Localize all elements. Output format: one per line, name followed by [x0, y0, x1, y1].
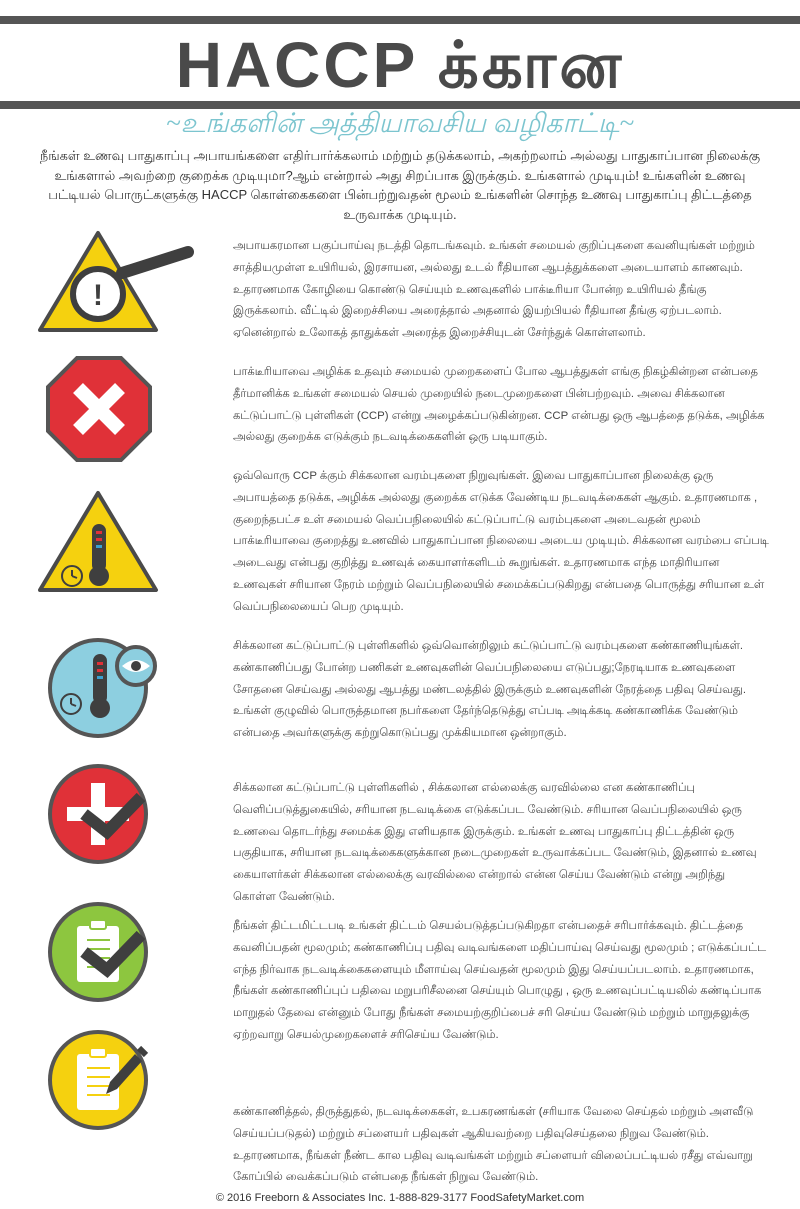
icon: green circle with clipboard and check — [48, 902, 148, 1002]
text block 5: பகுதியாக, சரியான நடவடிக்கைகளுக்கான நடைமுறைகள் உருவாக்கப்பட வேண்டும், இதனால் உணவு — [233, 847, 757, 859]
text block 6: நீங்கள் திட்டமிட்டபடி உங்கள் திட்டம் செயல்படுத்தப்படுகிறதா என்பதைச் சரிபார்க்கவும். திட்டத்தை — [233, 920, 743, 932]
intro text: நீங்கள் உணவு பாதுகாப்பு அபாயங்களை எதிர்பார்க்கலாம் மற்றும் தடுக்கலாம், அகற்றலாம் அல்லது பாதுகாப்பான நிலைக்கு — [40, 148, 760, 163]
icon: red circle with cross and check — [48, 764, 148, 864]
text block 3: அடைவது என்பது குறித்து உணவுக் கையாளர்களிடம் கூறுங்கள். உதாரணமாக எந்த மாதிரியான — [233, 557, 719, 569]
footer: © 2016 Freeborn & Associates Inc. 1-888-829-3177 FoodSafetyMarket.com — [216, 1192, 584, 1204]
text block 3 — [233, 470, 769, 614]
text block 5: கொள்ள வேண்டும். — [233, 891, 335, 903]
text block 3: குறைந்தபட்ச உள் சமையல் வெப்பநிலையில் கட்டுப்பாட்டு வரம்புகளை அடைவதன் மூலம் — [233, 514, 700, 526]
text block 3: வெப்பநிலையைப் பெற முடியும். — [233, 601, 404, 613]
icon: blue monitor circle — [48, 638, 157, 738]
intro text: பட்டியல் பொருட்களுக்கு HACCP கொள்கைகளை பின்பற்றுவதன் மூலம் உங்களின் சொந்த உணவு பாதுகாப்பு திட்டத்தை — [48, 187, 752, 202]
text block 3: அபாயத்தை தடுக்க, அழிக்க அல்லது குறைக்க எடுக்க வேண்டிய நடவடிக்கைகள் ஆகும். உதாரணமாக , — [233, 492, 757, 504]
text block 1: சாத்தியமுள்ள உயிரியல், இரசாயன, அல்லது உடல் ரீதியான ஆபத்துக்களை அடையாளம் காணவும். — [233, 262, 743, 274]
text block 1: அபாயகரமான பகுப்பாய்வு நடத்தி தொடங்கவும். உங்கள் சமையல் குறிப்புகளை கவனியுங்கள் மற்றும் — [233, 240, 755, 252]
text block 6: மாறுதல் தேவை என்னும் போது நீங்கள் சமையற்குறிப்பைச் சரி செய்ய வேண்டும் மற்றும் மாறுதலுக்கு — [233, 1007, 749, 1019]
text block 5: சிக்கலான கட்டுப்பாட்டு புள்ளிகளில் , சிக்கலான எல்லைக்கு வரவில்லை என கண்காணிப்பு — [233, 782, 695, 794]
text block 6: நீங்கள் கண்காணிப்புப் பதிவை மறுபரிசீலனை செய்யும் பொழுது , ஒரு உணவுப்பட்டியலில் கண்டிப்பாக — [233, 985, 761, 997]
text block 2: பாக்டீரியாவை அழிக்க உதவும் சமையல் முறைகளைப் போல ஆபத்துகள் எங்கு நிகழ்கின்றன என்பதை — [233, 366, 758, 378]
text block 7 — [233, 1106, 753, 1184]
text block 7: கண்காணித்தல், திருத்துதல், நடவடிக்கைகள், உபகரணங்கள் (சரியாக வேலை செய்தல் மற்றும் அளவீடு — [233, 1106, 753, 1118]
text block 7: கோப்பில் வைக்கப்படும் என்பதை நீங்கள் நிறுவ வேண்டும். — [233, 1171, 538, 1183]
text block 2: அல்லது குறைக்க எடுக்கும் நடவடிக்கைகளின் ஒரு படியாகும். — [233, 431, 547, 443]
text block 6: கவனிப்பதன் மூலமும்; கண்காணிப்பு பதிவு வடிவங்களை மதிப்பாய்வு செய்வது மூலமும் ; எடுக்கப்பட்ட — [233, 942, 766, 954]
text block 2 — [233, 366, 764, 444]
icon: yellow circle with clipboard and pencil — [48, 1030, 148, 1130]
text block 2: தீர்மானிக்க உங்கள் சமையல் செயல் முறையில் நடைமுறைகளை பின்பற்றவும். அவை சிக்கலான — [233, 388, 725, 400]
text block 1: உதாரணமாக கோழியை கொண்டு செய்யும் உணவுகளில் பாக்டீரியா போன்ற உயிரியல் தீங்கு — [233, 284, 706, 296]
text block 5: கையாளர்கள் சிக்கலான எல்லைக்கு வரவில்லை என்றால் என்ன செய்ய வேண்டும் என்று அறிந்து — [233, 869, 725, 881]
text block 6: ஏற்றவாறு செயல்முறைகளைச் சரிசெய்ய வேண்டும். — [233, 1029, 499, 1041]
subtitle: ~உங்களின் அத்தியாவசிய வழிகாட்டி~ — [166, 108, 634, 138]
text block 5: உணவை தொடர்ந்து சமைக்க இது எளியதாக இருக்கும். உங்கள் உணவு பாதுகாப்பு திட்டத்தின் ஒரு — [233, 826, 734, 838]
text block 7: செய்யப்படுதல்) மற்றும் சப்ளையர் பதிவுகள் ஆகியவற்றை பதிவுசெய்தலை நிறுவ வேண்டும். — [233, 1128, 709, 1140]
text block 1 — [233, 240, 755, 340]
title: HACCP க்கான — [176, 29, 624, 101]
text block 4: கண்காணிப்பது போன்ற பணிகள் உணவுகளின் வெப்பநிலையை எடுப்பது;நேரடியாக உணவுகளை — [233, 662, 735, 674]
text block 3: பாக்டீரியாவை குறைத்து உணவில் பாதுகாப்பான நிலையை அடைய முடியும். சிக்கலான வரம்பை எப்படி — [233, 535, 769, 547]
text block 5: வெளிப்படுத்துகையில், சரியான நடவடிக்கை எடுக்கப்பட வேண்டும். சரியான வெப்பநிலையில் ஒரு — [233, 804, 742, 816]
text block 1: இருக்கலாம். வீட்டில் இறைச்சியை அரைத்தால் அதனால் இயற்பியல் ரீதியான தீங்கு ஏற்படலாம். — [233, 305, 722, 317]
icon: hazard triangle with magnifier: ! — [93, 279, 103, 312]
text block 2: கட்டுப்பாட்டு புள்ளிகள் (CCP) என்று அழைக்கப்படுகின்றன. CCP என்பது ஒரு ஆபத்தை தடுக்க, அழிக்க — [233, 410, 764, 422]
intro text — [40, 148, 760, 223]
text block 4: என்பதை அவர்களுக்கு கற்றுகொடுப்பது முக்கியமான ஒன்றாகும். — [233, 727, 567, 739]
text block 6: எந்த நிர்வாக நடவடிக்கைகளையும் மீளாய்வு செய்வதன் மூலமும் இது செய்யப்படலாம். உதாரணமாக, — [233, 964, 754, 976]
text block 3: ஒவ்வொரு CCP க்கும் சிக்கலான வரம்புகளை நிறுவுங்கள். இவை பாதுகாப்பான நிலைக்கு ஒரு — [233, 470, 713, 482]
text block 1: ஏனென்றால் உலோகத் தாதுக்கள் அரைத்த இறைச்சியுடன் சேர்ந்துக் கொள்ளலாம். — [233, 327, 646, 339]
text block 4 — [233, 640, 746, 740]
text block 4: சிக்கலான கட்டுப்பாட்டு புள்ளிகளில் ஒவ்வொன்றிலும் கட்டுப்பாட்டு வரம்புகளை கண்காணியுங்கள். — [233, 640, 743, 652]
text block 7: உதாரணமாக, நீங்கள் நீண்ட கால பதிவு வடிவங்கள் மற்றும் சப்ளையர் விலைப்பட்டியல் ரசீது எவ்வாறு — [233, 1150, 753, 1162]
icon: hazard triangle with magnifier — [38, 230, 194, 332]
text block 6 — [233, 920, 766, 1042]
text block 3: உணவுகள் சரியான நேரம் மற்றும் வெப்பநிலையில் சமைக்கப்படுகிறது என்பதை பொருத்து சரியான உள் — [233, 579, 764, 591]
text block 4: சோதனை செய்வது அல்லது ஆபத்து மண்டலத்தில் இருக்கும் உணவுகளின் நேரத்தை பதிவு செய்வது. — [233, 684, 746, 696]
icon: triangle with thermometer and clock — [38, 490, 158, 592]
icon: red stop octagon with X — [46, 356, 152, 462]
text block 5 — [233, 782, 757, 903]
intro text: உங்களால் அவற்றை குறைக்க முடியுமா?ஆம் என்றால் அது சிறப்பாக இருக்கும். உங்களால் முடியும்! உங்களின் உணவு — [54, 168, 746, 182]
text block 4: உங்கள் குழுவில் பொருத்தமான நபர்களை தேர்ந்தெடுத்து எப்படி அடிக்கடி கண்காணிக்க வேண்டும் — [233, 705, 738, 717]
intro text: உருவாக்க முடியும். — [343, 206, 457, 222]
